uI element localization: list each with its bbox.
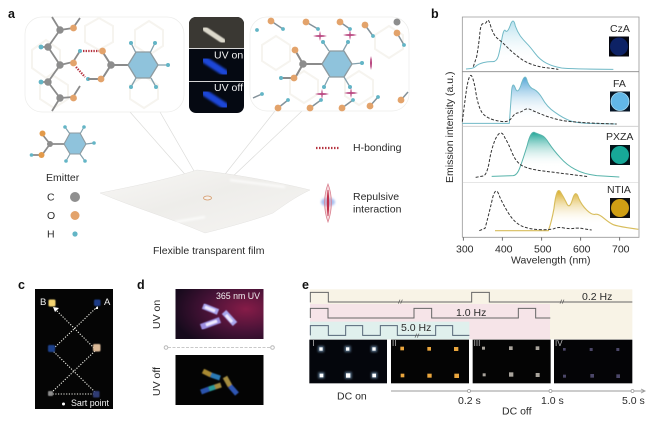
axis labels: Emission intensity (a.u.) — [444, 72, 456, 183]
repulsive interaction legend — [321, 184, 402, 222]
panel d: UV on photo: 365 nm UV — [216, 291, 260, 301]
photo I: I — [312, 339, 315, 348]
zoom guide lines — [130, 111, 302, 197]
photo IV: IV — [555, 339, 563, 348]
panel b: emission spectra chart: 700 — [612, 244, 630, 256]
panel b: emission spectra chart: 300 — [456, 244, 474, 256]
panel b: emission spectra chart: Wavelength (nm) — [511, 254, 591, 266]
atom legend: Emitter — [46, 172, 80, 184]
panel b: emission spectra chart — [444, 17, 639, 266]
H-bonding legend — [316, 142, 402, 154]
photo IV — [554, 339, 632, 383]
LED array photos — [309, 339, 632, 383]
flexible transparent film — [100, 170, 310, 257]
panel c: dark photo with LED path: A — [104, 297, 111, 308]
hydrogen bonds — [76, 51, 99, 77]
divider — [164, 346, 274, 349]
atom legend: H — [47, 228, 55, 240]
time axis arrow: DC off — [502, 406, 532, 418]
photo II: II — [392, 339, 396, 348]
photo II — [391, 339, 469, 383]
panel a: hydrogen bonding close-up — [25, 17, 184, 112]
panel b: emission spectra chart: 400 — [495, 244, 513, 256]
panel d: UV off photo — [176, 355, 264, 405]
time axis arrow: 0.2 s — [458, 395, 481, 407]
panel d: UV on photo — [176, 289, 264, 339]
panel e: pulse timing chart — [310, 289, 632, 339]
axis break marks — [398, 300, 564, 338]
panel b: emission spectra chart: 600 — [573, 244, 591, 256]
5.0 Hz waveform — [310, 326, 469, 335]
repulsive interaction legend: Repulsive — [353, 191, 399, 203]
panel c: dark photo with LED path: Sart point — [71, 398, 110, 408]
panel b: emission spectra chart: 500 — [534, 244, 552, 256]
emitter molecule — [88, 41, 170, 89]
spectrum CzA — [466, 20, 613, 69]
flexible transparent film: Flexible transparent film — [153, 245, 265, 257]
DC on label: DC on — [337, 390, 367, 402]
panel e label: e — [302, 278, 309, 292]
photo I — [309, 339, 387, 383]
repulsive interaction legend: interaction — [353, 204, 402, 216]
frequency labels: 5.0 Hz — [401, 322, 431, 334]
0.2 Hz waveform — [310, 292, 632, 302]
colored bands — [310, 289, 632, 339]
spectrum PXZA — [476, 132, 619, 177]
sample swatches: PXZA — [606, 131, 633, 143]
photo inset: UV on and off: UV off — [214, 82, 243, 94]
panel c: dark photo with LED path: B — [40, 297, 46, 308]
sample swatches: CzA — [610, 23, 630, 35]
atom legend: C — [47, 192, 55, 204]
time axis arrow — [391, 389, 645, 418]
panel b label: b — [431, 7, 439, 21]
1.0 Hz waveform — [310, 308, 550, 318]
panel c: dark photo with LED path — [35, 289, 113, 409]
spectra frame — [462, 17, 639, 241]
sample swatches: NTIA — [607, 184, 631, 196]
photo inset: UV on and off — [189, 17, 244, 113]
sample swatches — [606, 23, 633, 218]
UV on label: UV on — [151, 300, 163, 329]
spectrum FA — [462, 75, 617, 124]
time axis arrow: 5.0 s — [622, 395, 645, 407]
photo III: III — [474, 339, 480, 348]
photo inset: UV on and off: UV on — [214, 50, 243, 62]
polymer chain — [41, 17, 80, 111]
frequency labels: 0.2 Hz — [582, 291, 612, 303]
H-bonding legend: H-bonding — [353, 142, 402, 154]
surrounding fragments — [253, 21, 408, 108]
panel c label: c — [18, 278, 25, 292]
UV off label: UV off — [151, 367, 163, 396]
background polymer pattern — [32, 18, 163, 108]
panel a: repulsive interaction close-up — [250, 17, 409, 111]
repulsive markers — [313, 30, 372, 99]
frequency labels — [401, 291, 612, 334]
emitter structure — [30, 125, 96, 163]
atom legend — [46, 172, 80, 240]
photo III — [473, 339, 551, 383]
sample swatches: FA — [613, 78, 626, 90]
spectrum NTIA — [479, 191, 638, 231]
atom legend: O — [47, 210, 55, 222]
frequency labels: 1.0 Hz — [456, 307, 486, 319]
time axis arrow: 1.0 s — [541, 395, 564, 407]
panel d label: d — [137, 278, 145, 292]
panel a label: a — [8, 7, 16, 21]
emitter molecule — [279, 40, 364, 89]
